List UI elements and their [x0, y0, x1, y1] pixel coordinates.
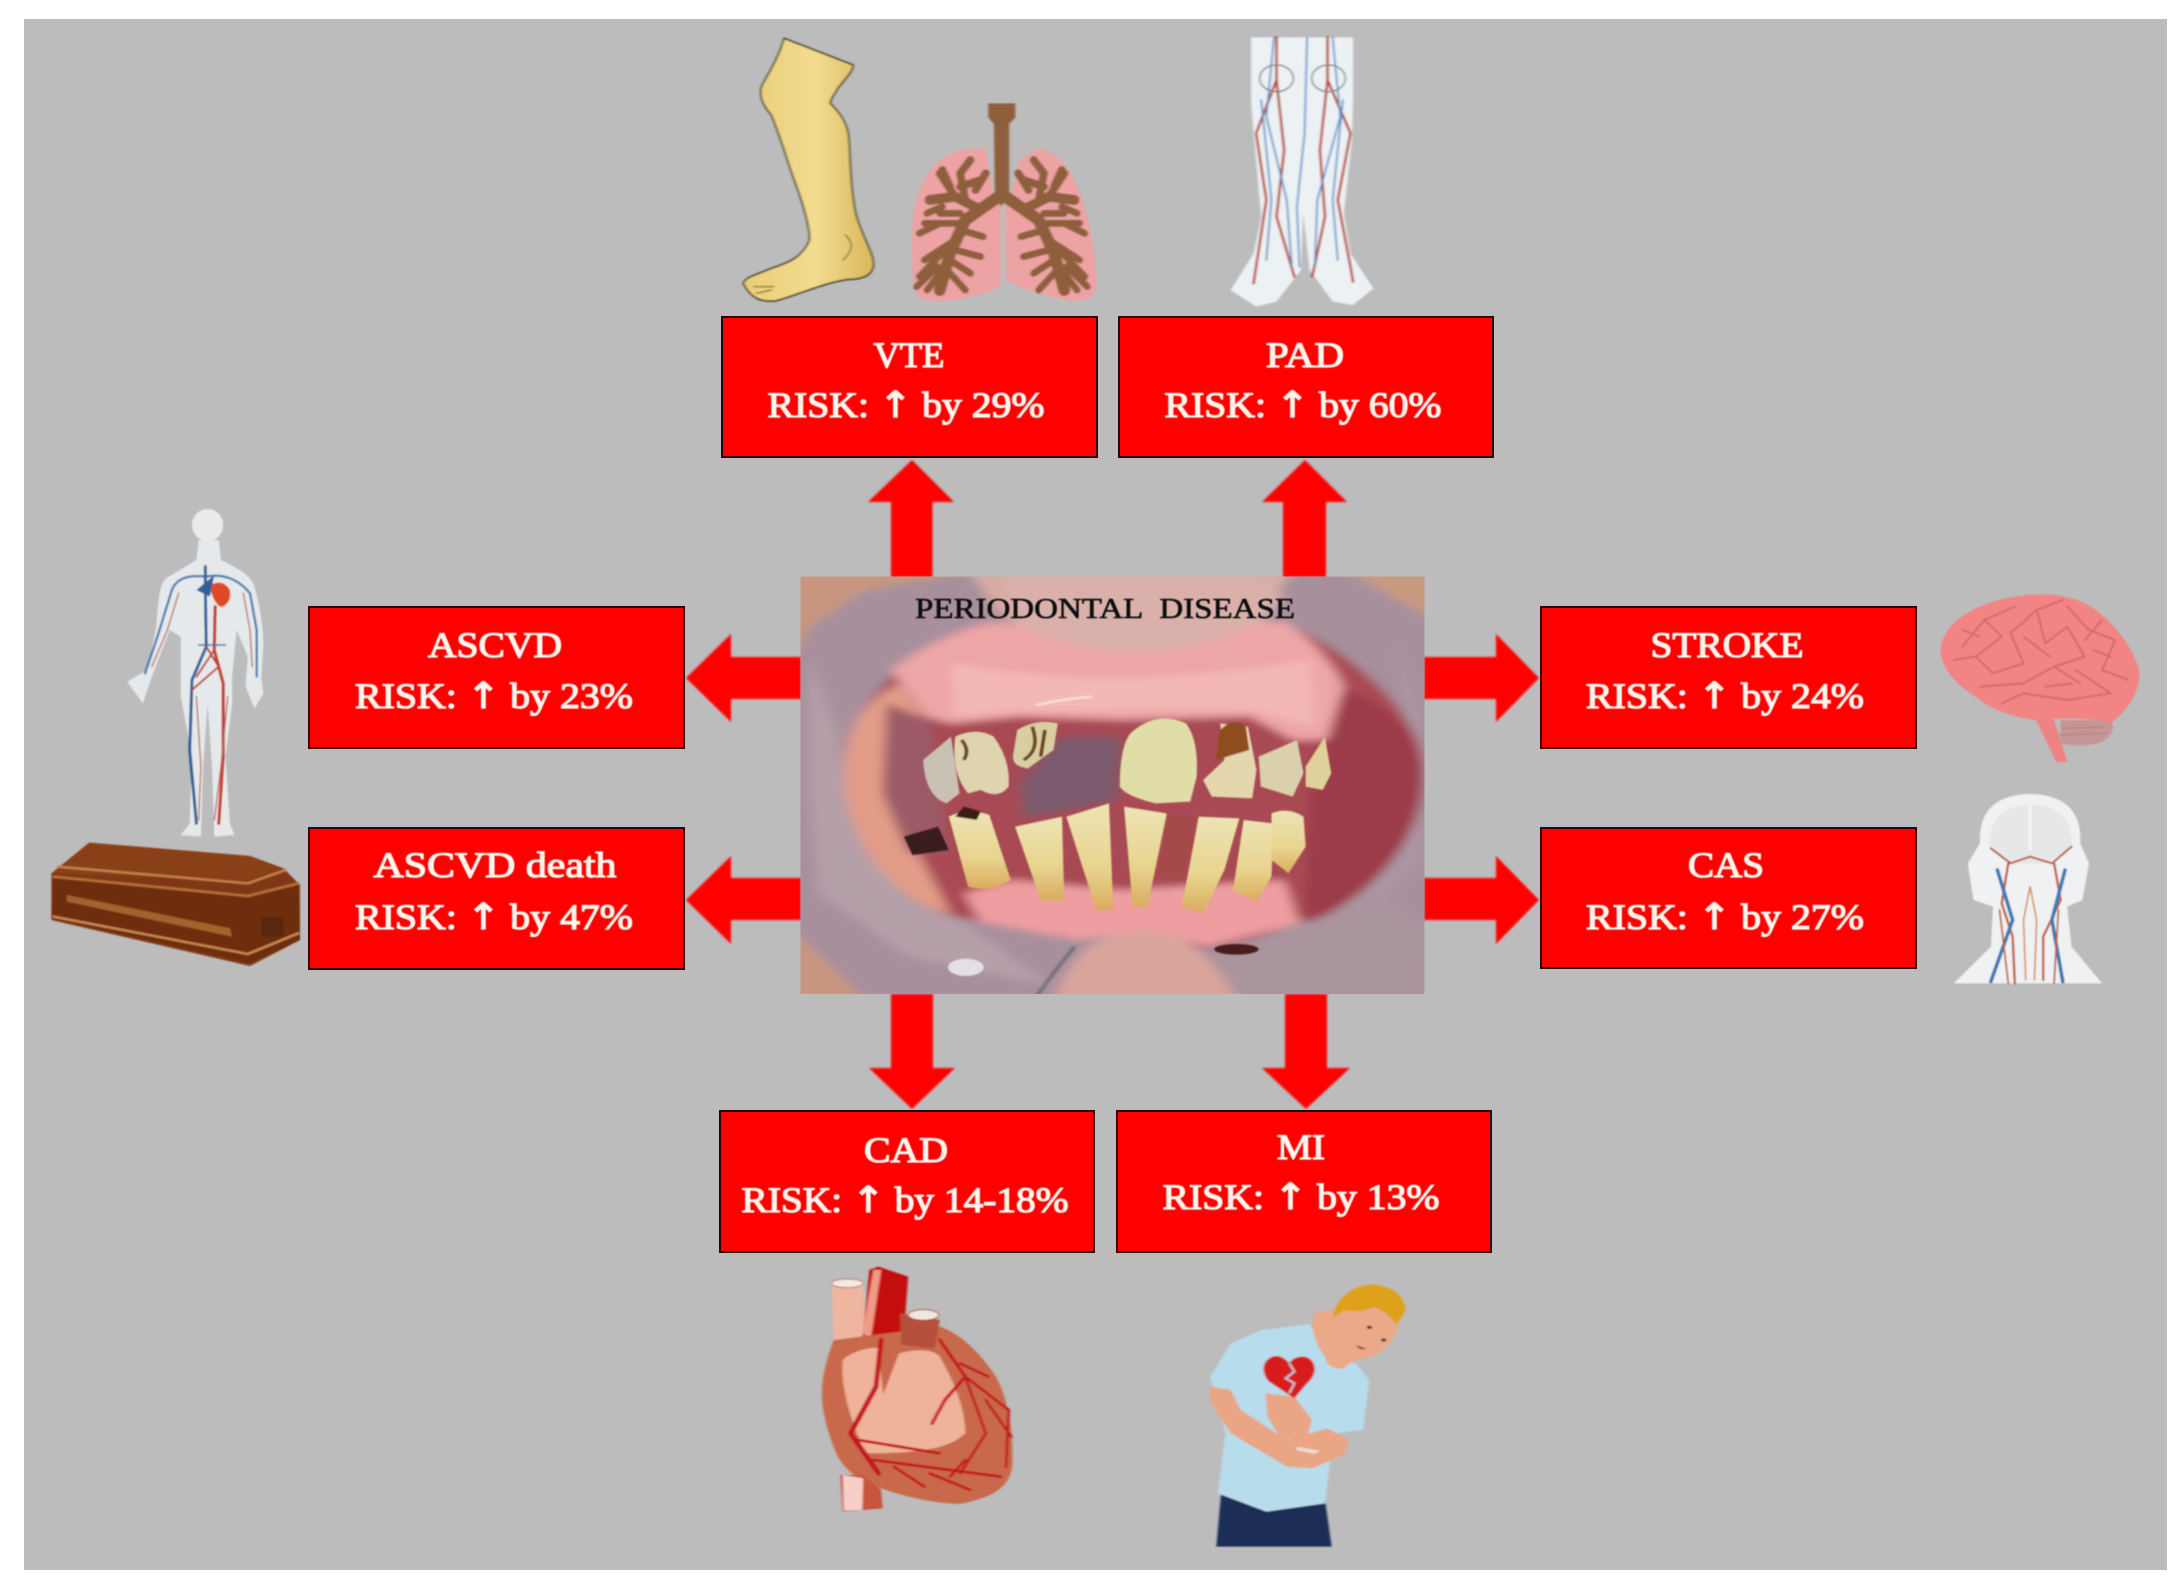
- box: VTE: [722, 317, 1097, 457]
- box: ASCVD: [309, 607, 684, 748]
- box: CAS: RISK: ↑ by 27%: [1586, 897, 1864, 938]
- icon: man having heart attack: [1210, 1284, 1405, 1547]
- box: VTE: RISK: ↑ by 29%: [768, 385, 1044, 426]
- box: ASCVD: ASCVD: [428, 625, 562, 665]
- box: MI: MI: [1277, 1127, 1325, 1167]
- box: STROKE: [1541, 607, 1916, 748]
- box: CAD: [720, 1111, 1094, 1252]
- arrow: to CAD: [869, 994, 955, 1109]
- box: ASCVD death: RISK: ↑ by 47%: [355, 897, 633, 938]
- box: STROKE: RISK: ↑ by 24%: [1586, 676, 1864, 717]
- box: CAD: RISK: ↑ by 14-18%: [742, 1180, 1068, 1221]
- box: ASCVD death: ASCVD death: [374, 845, 616, 885]
- box: PAD: RISK: ↑ by 60%: [1164, 385, 1442, 426]
- box: MI: RISK: ↑ by 13%: [1162, 1177, 1440, 1218]
- arrow: to CAS: [1424, 856, 1539, 944]
- box: CAD: CAD: [864, 1130, 948, 1170]
- central photo: periodontal disease mouth: [789, 567, 1438, 1000]
- icon: head and neck arteries: [1954, 794, 2102, 983]
- box: VTE: VTE: [874, 335, 944, 375]
- box: MI: [1117, 1111, 1491, 1252]
- photo title: PERIODONTAL DISEASE: [915, 593, 1295, 625]
- icon: coffin: [51, 843, 300, 966]
- box: CAS: [1541, 828, 1916, 968]
- arrow: to MI: [1262, 994, 1350, 1109]
- arrow: to ASCVD: [686, 634, 801, 722]
- icon: leg arteries and veins: [1231, 37, 1373, 307]
- box: ASCVD: RISK: ↑ by 23%: [355, 676, 633, 717]
- icon: lungs: [912, 103, 1096, 301]
- icon: body circulatory system: [127, 509, 263, 837]
- box: ASCVD death: [309, 828, 684, 969]
- box: CAS: CAS: [1688, 845, 1764, 885]
- box: STROKE: STROKE: [1650, 625, 1804, 665]
- box: PAD: [1119, 317, 1493, 457]
- arrow: to STROKE: [1424, 634, 1539, 722]
- icon: heart: [822, 1267, 1013, 1512]
- icon: brain: [1940, 594, 2139, 762]
- arrow: to ASCVD death: [686, 856, 801, 944]
- icon: leg: [743, 38, 873, 301]
- box: PAD: PAD: [1266, 335, 1344, 375]
- arrow: to PAD: [1262, 460, 1347, 577]
- arrow: to VTE: [868, 460, 954, 577]
